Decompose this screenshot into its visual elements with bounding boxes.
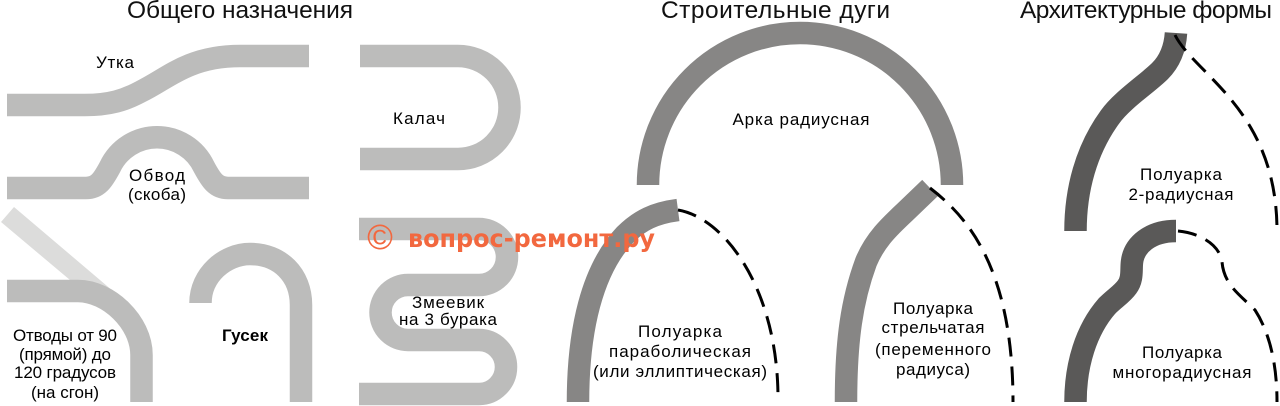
half arch: pointed: (переменного [875, 340, 991, 359]
watermark [367, 218, 655, 257]
pipe: obvod: (скоба) [128, 185, 186, 204]
half arch: two-radius [1076, 33, 1277, 231]
half arch: multi-radius: Полуарка [1142, 343, 1223, 362]
pipe: coil: Змеевик [412, 293, 485, 312]
arch: radius [648, 33, 952, 185]
pipe: bends 90 to 120 degrees: (на сгон) [31, 383, 99, 402]
half arch: two-radius: Полуарка [1140, 165, 1223, 184]
pipe: kalach: Калач [393, 109, 445, 128]
half arch: two-radius: 2-радиусная [1128, 185, 1234, 204]
pipe: bends 90 to 120 degrees: Отводы от 90 [13, 326, 117, 345]
half arch: multi-radius: многорадиусная [1112, 363, 1252, 382]
pipe: coil: на 3 бурака [399, 310, 498, 329]
pipe: coil [359, 229, 507, 394]
half arch: pointed: радиуса) [896, 360, 970, 379]
watermark: вопрос-ремонт.ру [408, 224, 655, 253]
half arch: parabolic: Полуарка [638, 322, 723, 341]
watermark: © [367, 218, 393, 257]
half arch: parabolic: параболическая [609, 342, 751, 361]
pipe: bends 90 to 120 degrees [1, 207, 142, 402]
pipe: bends 90 to 120 degrees: 120 градусов [14, 363, 116, 382]
pipe: obvod [7, 137, 309, 204]
pipe: bends 90 to 120 degrees: (прямой) до [19, 345, 111, 364]
pipe: gusek [200, 254, 301, 402]
pipe: utka: Утка [96, 53, 135, 72]
half arch: pointed: Полуарка [893, 299, 974, 318]
half arch: parabolic [578, 210, 778, 402]
pipe: utka [7, 53, 309, 105]
half arch: pointed [846, 188, 1013, 402]
half arch: pointed: стрельчатая [882, 318, 984, 337]
half arch: multi-radius [1076, 231, 1277, 402]
arch: radius: Арка радиусная [732, 110, 870, 129]
pipe: kalach [360, 56, 510, 159]
half arch: parabolic: (или эллиптическая) [593, 362, 767, 381]
pipe: obvod: Обвод [129, 166, 185, 185]
pipe: gusek: Гусек [222, 326, 268, 345]
